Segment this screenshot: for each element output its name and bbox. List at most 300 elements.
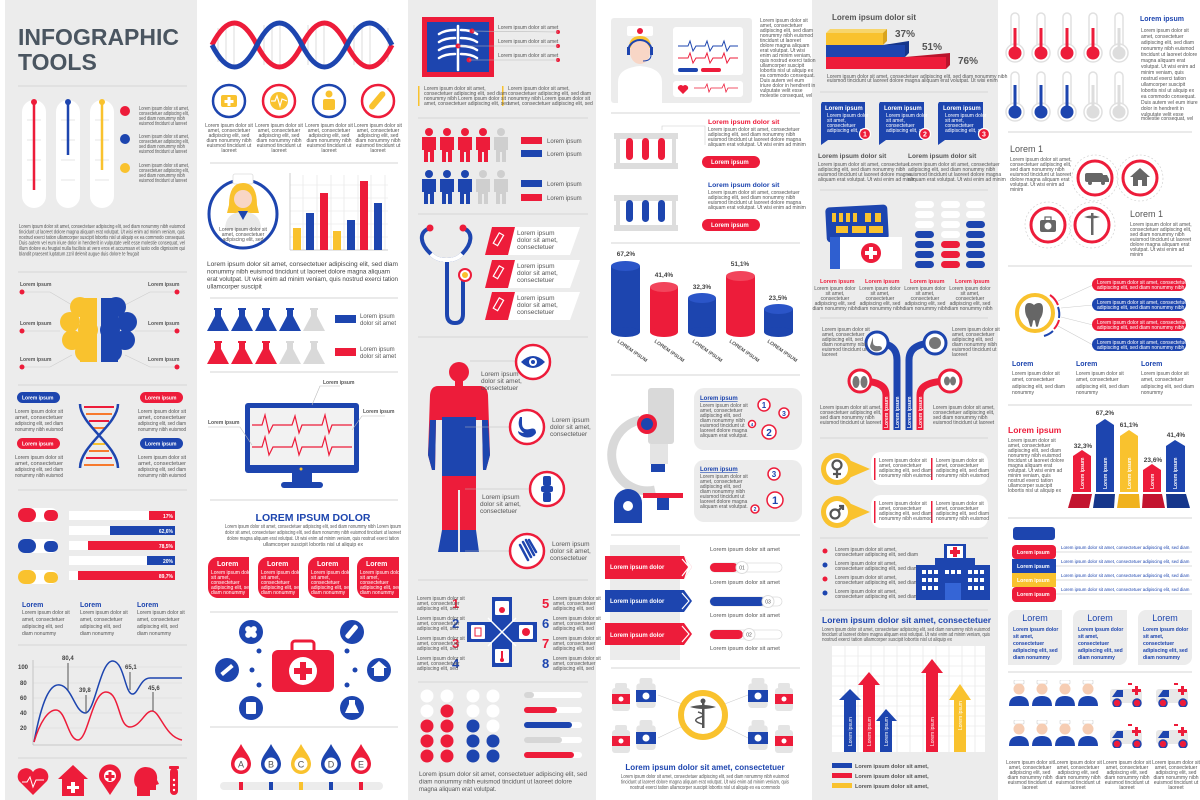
icon circles: ambulance, house, kit, caduceus: minim bbox=[1130, 252, 1143, 258]
four label columns: diam nonummy nibh bbox=[902, 306, 948, 312]
nurse operator with monitor bbox=[611, 18, 752, 103]
arrow bar chart with heading bbox=[822, 615, 992, 752]
test tubes: red: Lorem ipsum dolor sit amet, consectetuer bbox=[708, 127, 800, 133]
bar chart bbox=[290, 173, 388, 250]
ribbons and sliders bbox=[605, 545, 782, 660]
paragraph: nurse text: iriure dolor in hendrerit in bbox=[760, 83, 816, 89]
speech bubbles 1-3: Lorem ipsum dolor bbox=[886, 113, 928, 119]
paragraph: intro: Lorem ipsum dolor sit amet, consectetuer adipiscing elit, sed diam nonummy nibh euismod bbox=[19, 224, 185, 230]
text columns: Lorem: diam nonummy bbox=[137, 631, 172, 637]
paragraph: intro bbox=[19, 224, 185, 258]
legend: thermometers: sed diam nonummy nibh bbox=[139, 144, 185, 150]
text columns: Lorem: diam nonummy bbox=[80, 631, 115, 637]
legend: thermometers: Lorem ipsum dolor sit amet, bbox=[139, 163, 189, 169]
numbered cards: 1 bbox=[762, 401, 767, 410]
test tubes: red: Lorem ipsum bbox=[711, 160, 749, 166]
numbered cross diagram 1-8: amet, consectetuer bbox=[553, 621, 596, 627]
human body diagram: consectetuer bbox=[481, 385, 519, 392]
test tubes: red: aliquam erat volutpat. Ut wisi enim ad minim bbox=[708, 142, 806, 148]
arrow bar chart with percentages: Lorem ipsum bbox=[1127, 457, 1133, 489]
red cards row: adipiscing elit, sed bbox=[261, 585, 302, 591]
numbered cross diagram 1-8: amet, consectetuer bbox=[553, 641, 596, 647]
four label columns: consectetuer bbox=[956, 296, 985, 302]
organ tree diagram: Lorem ipsum dolor sit amet, bbox=[933, 405, 995, 411]
arrow bar chart with percentages: lobortis nisl ut aliquip ex bbox=[1008, 488, 1062, 494]
icon circles row: Lorem ipsum dolor sit bbox=[255, 123, 304, 129]
text: Lorem ipsum (thermometers): volutpat. Ut wisi enim ad bbox=[1141, 64, 1195, 70]
text columns: bottom col 6: adipiscing elit, sed bbox=[1058, 770, 1099, 776]
icon circles row: Lorem ipsum dolor sit bbox=[354, 123, 403, 129]
organ tree diagram bbox=[820, 327, 1000, 430]
DNA with labels: Lorem ipsum bbox=[22, 396, 54, 402]
red cards row: Lorem bbox=[366, 561, 387, 568]
red cards row: adipiscing elit, sed bbox=[211, 585, 252, 591]
icon circles: ambulance, house, kit, caduceus bbox=[1010, 144, 1192, 258]
line chart bbox=[18, 656, 182, 745]
icon circles: ambulance, house, kit, caduceus: euismod tincidunt ut laoreet bbox=[1130, 237, 1192, 243]
gray cards: Lorem: Lorem ipsum dolor bbox=[1013, 627, 1058, 633]
arrow bar chart with percentages: minim veniam, quis bbox=[1008, 473, 1051, 479]
test tubes: blue: euismod tincidunt ut laoreet dolore magna bbox=[708, 200, 801, 206]
numbered cards: 1 bbox=[772, 495, 778, 507]
gray cards: Lorem: diam nonummy bbox=[1143, 655, 1180, 661]
organ tree diagram: Lorem ipsum dolor sit amet, bbox=[820, 405, 882, 411]
ECG monitor: Lorem ipsum bbox=[208, 420, 240, 426]
ribbons and sliders: Lorem ipsum dolor sit amet bbox=[710, 646, 780, 652]
3D bar chart with percentages: Lorem ipsum dolor sit bbox=[832, 13, 916, 22]
blood drops A-E: D bbox=[328, 760, 335, 770]
numbered cross diagram 1-8: Lorem ipsum dolor sit bbox=[553, 616, 601, 622]
text pair: Lorem ipsum dolor sit bbox=[818, 153, 1006, 183]
red cards row: diam nonummy bbox=[261, 590, 296, 596]
icon circles row: adipiscing elit, sed bbox=[358, 133, 399, 139]
text columns: Lorem (col 6): amet, consectetuer bbox=[1012, 377, 1055, 383]
brain diagram: Lorem ipsum bbox=[20, 357, 52, 363]
human body diagram: Lorem ipsum bbox=[552, 541, 590, 548]
paragraph: nurse text: dolore magna aliquam bbox=[760, 43, 809, 49]
numbered cards: Lorem ipsum dolor sit bbox=[700, 474, 748, 480]
speech bubbles 1-3: Lorem ipsum bbox=[884, 106, 922, 112]
paragraph: intro: tincidunt ut laoreet dolore magna aliquam erat volutpat. Ut wisi enim ad minim veniam, quis bbox=[19, 230, 185, 236]
numbered cards: adipiscing elit, sed bbox=[700, 413, 741, 419]
heading: LOREM IPSUM DOLOR: dolor sit amet, consectetuer adipiscing elit, sed diam nonummy nibh euismod tincidunt ut laoreet bbox=[225, 530, 401, 536]
blood drops A-E: A bbox=[238, 760, 244, 770]
text columns: Lorem: adipiscing elit, sed bbox=[22, 624, 63, 630]
organ tree diagram: amet, consectetuer bbox=[822, 332, 865, 338]
icon circles: ambulance, house, kit, caduceus: sed diam nonummy nibh bbox=[1130, 232, 1185, 238]
flasks with legend: Lorem ipsum bbox=[360, 314, 395, 320]
DNA with labels: adipiscing elit, sed diam bbox=[15, 421, 63, 427]
text: Lorem ipsum (thermometers): lobortis nisl ut aliquip ex bbox=[1141, 88, 1195, 94]
text columns: Lorem: diam nonummy bbox=[22, 631, 57, 637]
medicine bottle with labels: Lorem ipsum dolor sit amet, consectetuer adipiscing elit, sed diam bbox=[1061, 545, 1190, 550]
text columns: Lorem (col 6): amet, consectetuer bbox=[1141, 377, 1184, 383]
heading and text: caduceus: Lorem ipsum dolor sit amet, consectetuer bbox=[625, 763, 785, 772]
stethoscope with syringe labels: consectetuer bbox=[517, 309, 555, 316]
icon circles row: amet, consectetuer bbox=[357, 128, 400, 134]
icon circles: ambulance, house, kit, caduceus: minim bbox=[1010, 187, 1023, 193]
test tubes: blue: adipiscing elit, sed diam nonummy nibh bbox=[708, 195, 795, 201]
icon circles row: amet, consectetuer bbox=[208, 128, 251, 134]
hospital with bullet list: Lorem ipsum dolor sit amet, bbox=[835, 575, 897, 581]
cylinder chart: 51,1% bbox=[731, 261, 749, 268]
text columns: bottom col 6: diam nonummy nibh bbox=[1055, 775, 1101, 781]
text columns: Lorem (col 6): nonummy bbox=[1141, 390, 1163, 396]
3D bar chart with percentages: euismod tincidunt ut laoreet dolore magna aliquam erat volutpat. Ut wisi enim bbox=[827, 78, 998, 84]
red cards row: Lorem ipsum dolor bbox=[360, 570, 402, 576]
organ tree diagram: euismod tincidunt ut laoreet bbox=[820, 420, 882, 426]
icon circles: ambulance, house, kit, caduceus: consectetuer adipiscing elit, bbox=[1010, 162, 1071, 168]
ribbons and sliders: Lorem ipsum dolor sit amet bbox=[710, 547, 780, 553]
medicine bottle with labels: Lorem ipsum bbox=[1017, 578, 1050, 584]
icon circles: ambulance, house, kit, caduceus: Lorem ipsum dolor sit amet, bbox=[1010, 157, 1072, 163]
arrow bar chart with heading: nostrud exerci tation ullamcorper suscipit lobortis nisl ut aliquip ex bbox=[822, 637, 952, 643]
four label columns: Lorem ipsum bbox=[955, 279, 990, 285]
numbered cards: 3 bbox=[772, 470, 777, 479]
people icons chart: Lorem ipsum bbox=[547, 196, 582, 202]
line chart: 80 bbox=[20, 681, 27, 687]
text columns: Lorem (col 6): adipiscing elit, sed diam bbox=[1076, 384, 1129, 390]
text columns: bottom col 6: euismod tincidunt ut bbox=[1105, 780, 1150, 786]
blood drops A-E: B bbox=[268, 760, 274, 770]
DNA with labels: Lorem ipsum bbox=[145, 396, 177, 402]
speech bubbles 1-3: consectetuer bbox=[945, 123, 974, 129]
ribbons and sliders: Lorem ipsum dolor sit amet bbox=[710, 580, 780, 586]
numbered cards: 3 bbox=[782, 411, 786, 418]
gender bubbles: nonummy nibh euismod bbox=[936, 516, 989, 522]
text pair: Lorem ipsum dolor sit: Lorem ipsum dolor sit bbox=[908, 153, 977, 160]
legend: thermometers: consectetuer adipiscing elit, bbox=[139, 139, 189, 145]
paragraph: intro: Duis autem vel eum iriure dolor in hendrerit in vulputate velit esse molestie consequat, vel bbox=[19, 240, 185, 246]
paragraph: nurse text: adipiscing elit, sed diam bbox=[760, 28, 813, 34]
red cards row: consectetuer bbox=[311, 580, 340, 586]
people icons chart: Lorem ipsum bbox=[547, 139, 582, 145]
arrow bar chart with percentages bbox=[1008, 410, 1190, 508]
gray cards: Lorem: Lorem ipsum dolor bbox=[1143, 627, 1188, 633]
icon circles: ambulance, house, kit, caduceus: Lorem ipsum dolor sit amet, bbox=[1130, 222, 1192, 228]
tooth diagram with pills: adipiscing elit, sed diam nonummy nibh bbox=[1097, 325, 1184, 331]
organ tree diagram: Lorem ipsum bbox=[884, 396, 890, 428]
numbered cards: 2 bbox=[754, 507, 757, 513]
icon circles: ambulance, house, kit, caduceus: Lorem 1 bbox=[1010, 144, 1043, 154]
text columns: Lorem: adipiscing elit, sed bbox=[80, 624, 121, 630]
numbered cross diagram 1-8: adipiscing elit, sed bbox=[553, 606, 594, 612]
numbered cross diagram 1-8: amet, consectetuer bbox=[553, 661, 596, 667]
tooth diagram with pills: Lorem ipsum dolor sit amet, consectetuer bbox=[1097, 300, 1189, 306]
paragraph: nurse text: Duis autem vel eum bbox=[760, 78, 804, 84]
text columns: Lorem: amet, consectetuer bbox=[22, 617, 65, 623]
text: Lorem ipsum (thermometers) bbox=[1140, 16, 1198, 122]
arrow bar chart with percentages: 23,6% bbox=[1144, 457, 1162, 464]
people icons chart bbox=[422, 128, 582, 204]
numbered cross diagram 1-8: Lorem ipsum dolor sit bbox=[417, 596, 465, 602]
icon circles row: euismod tincidunt ut bbox=[356, 143, 401, 149]
paragraph: nurse text bbox=[760, 18, 816, 99]
text columns: bottom col 6: diam nonummy nibh bbox=[1104, 775, 1150, 781]
thermometer gauges bbox=[22, 99, 114, 208]
paragraph: nurse text: quis nostrud exerci tation bbox=[760, 58, 816, 64]
speech bubbles 1-3: Lorem ipsum dolor bbox=[827, 113, 869, 119]
arrow bar chart with percentages: Lorem ipsum dolor sit bbox=[1008, 438, 1056, 444]
line chart: 45,6 bbox=[148, 686, 160, 692]
numbered cards: 4 bbox=[751, 422, 754, 427]
numbered cross diagram 1-8: amet, consectetuer bbox=[417, 621, 460, 627]
3D bar chart with percentages: 37% bbox=[895, 29, 915, 40]
numbered cards: euismod tincidunt ut bbox=[700, 494, 745, 500]
panel: column 3 background bbox=[408, 0, 596, 800]
text columns: Lorem (col 6): Lorem bbox=[1012, 361, 1033, 368]
text pair: Lorem ipsum dolor sit: euismod tincidunt ut laoreet dolore magna bbox=[908, 172, 1001, 178]
text columns: Lorem (col 6): Lorem bbox=[1141, 361, 1162, 368]
gender bubbles: nonummy nibh euismod bbox=[879, 473, 932, 479]
brain diagram: Lorem ipsum bbox=[20, 282, 52, 288]
paragraph: nurse text: tincidunt ut laoreet bbox=[760, 38, 801, 44]
human body diagram: consectetuer bbox=[550, 555, 588, 562]
hospital with bullet list: consectetuer adipiscing elit, sed diam bbox=[835, 552, 918, 558]
numbered cards: Lorem ipsum dolor sit bbox=[700, 403, 748, 409]
numbered cards: laoreet dolore magna bbox=[700, 428, 747, 434]
paragraph: nurse section: erat volutpat. Ut wisi enim ad minim veniam, quis nostrud exerci tation bbox=[207, 276, 399, 283]
text columns: bottom col 6: diam nonummy nibh bbox=[1153, 775, 1199, 781]
numbered cross diagram 1-8: adipiscing elit, sed bbox=[553, 626, 594, 632]
icon circles row: adipiscing elit, sed bbox=[309, 133, 350, 139]
numbered cross diagram 1-8: amet, consectetuer bbox=[417, 661, 460, 667]
numbered cross diagram 1-8: 4 bbox=[452, 656, 460, 671]
text columns: Lorem (col 6): Lorem ipsum dolor sit bbox=[1012, 371, 1060, 377]
line chart: 100 bbox=[18, 665, 29, 671]
medicine bottle with labels: Lorem ipsum dolor sit amet, consectetuer adipiscing elit, sed diam bbox=[1061, 587, 1190, 592]
line chart: 60 bbox=[20, 696, 27, 702]
red cards row: Lorem bbox=[267, 561, 288, 568]
legend: arrow chart: Lorem ipsum dolor sit amet, bbox=[855, 764, 929, 770]
medicine bottle with labels: Lorem ipsum dolor sit amet, consectetuer adipiscing elit, sed diam bbox=[1061, 559, 1190, 564]
heading: LOREM IPSUM DOLOR bbox=[225, 512, 401, 548]
text columns: bottom col 6: laoreet bbox=[1022, 785, 1038, 791]
heading: LOREM IPSUM DOLOR: ullamcorper suscipit lobortis nisl ut aliquip ex bbox=[263, 542, 364, 548]
speech bubbles 1-3: adipiscing elit, sed bbox=[886, 128, 927, 134]
text: Lorem ipsum (thermometers): Lorem ipsum bbox=[1140, 16, 1184, 23]
DNA with labels: nonummy nibh euismod bbox=[15, 427, 63, 433]
four label columns: Lorem ipsum bbox=[865, 279, 900, 285]
arrow bar chart with percentages: Lorem ipsum bbox=[1103, 457, 1109, 489]
four label columns bbox=[812, 279, 993, 312]
speech bubbles 1-3: consectetuer bbox=[827, 123, 856, 129]
text: Lorem ipsum (thermometers): tincidunt ut laoreet dolore bbox=[1141, 52, 1197, 58]
icon circles row: adipiscing elit, sed bbox=[209, 133, 250, 139]
stethoscope with syringe labels: Lorem ipsum bbox=[517, 263, 555, 270]
four label columns: sit amet, bbox=[961, 291, 979, 297]
four label columns: consectetuer bbox=[911, 296, 940, 302]
four label columns: Lorem ipsum bbox=[910, 279, 945, 285]
gray cards: Lorem: consectetuer bbox=[1143, 641, 1174, 647]
3D bar chart with percentages: 76% bbox=[958, 56, 978, 67]
organ tree diagram: Lorem ipsum bbox=[907, 396, 913, 428]
x-ray with callouts: Lorem ipsum dolor sit amet bbox=[498, 25, 559, 31]
panel: column 5 background bbox=[812, 0, 998, 800]
icon circles: ambulance, house, kit, caduceus: consectetuer adipiscing elit, bbox=[1130, 227, 1191, 233]
people icons chart: Lorem ipsum bbox=[547, 182, 582, 188]
cylinder chart: LOREM IPSUM bbox=[691, 339, 723, 364]
text columns: bottom col 6: adipiscing elit, sed bbox=[1107, 770, 1148, 776]
icon circles row: laoreet bbox=[370, 148, 386, 154]
nurse avatar circle: adipiscing elit, sed bbox=[223, 237, 264, 243]
heading and text: caduceus: Lorem ipsum dolor sit amet, consectetuer adipiscing elit, sed diam nonummy nibh euismod bbox=[621, 774, 789, 780]
numbered cross diagram 1-8: 8 bbox=[542, 656, 549, 671]
tooth diagram with pills: Lorem ipsum dolor sit amet, consectetuer bbox=[1097, 320, 1189, 326]
icon circles row: euismod tincidunt ut bbox=[257, 143, 302, 149]
text blocks with yellow bars: Lorem ipsum dolor sit amet, bbox=[424, 86, 486, 92]
text pair: Lorem ipsum dolor sit: aliquam erat volutpat. Ut wisi enim ad minim bbox=[818, 177, 916, 183]
numbered cards: diam nonummy nibh bbox=[700, 418, 745, 424]
text columns: bottom col 6: amet, consectetuer bbox=[1106, 765, 1149, 771]
paragraph: bottom col 3 bbox=[419, 772, 587, 793]
numbered cards: diam nonummy nibh bbox=[700, 489, 745, 495]
numbered cards: laoreet dolore magna bbox=[700, 499, 747, 505]
text blocks with yellow bars: consectetuer adipiscing elit, sed diam bbox=[424, 91, 507, 97]
arrow bar chart with percentages: 61,1% bbox=[1120, 422, 1138, 429]
ribbons and sliders: Lorem ipsum dolor bbox=[610, 633, 665, 639]
DNA with labels: Lorem ipsum bbox=[22, 442, 54, 448]
text columns: bottom col 6: adipiscing elit, sed bbox=[1010, 770, 1051, 776]
numbered cross diagram 1-8: adipiscing elit, sed bbox=[553, 666, 594, 672]
arrow bar chart with percentages: volutpat. Ut wisi enim ad bbox=[1008, 468, 1062, 474]
x-ray with callouts: Lorem ipsum dolor sit amet bbox=[498, 53, 559, 59]
icon circles row bbox=[205, 85, 403, 154]
arrow bar chart with percentages: adipiscing elit, sed diam bbox=[1008, 448, 1061, 454]
capsules with percentage bars: 89,7% bbox=[159, 574, 174, 580]
text columns: bottom col 6: amet, consectetuer bbox=[1155, 765, 1198, 771]
text columns: Lorem: adipiscing elit, sed bbox=[137, 624, 178, 630]
text: Lorem ipsum (thermometers): ullamcorper suscipit bbox=[1141, 82, 1186, 88]
speech bubbles 1-3: sit amet, bbox=[827, 118, 846, 124]
DNA with labels: amet, consectetuer bbox=[138, 415, 186, 421]
arrow bar chart with heading: Lorem ipsum bbox=[930, 717, 936, 746]
speech bubbles 1-3: sit amet, bbox=[886, 118, 905, 124]
numbered cross diagram 1-8: amet, consectetuer bbox=[417, 601, 460, 607]
text columns: Lorem: amet, consectetuer bbox=[137, 617, 180, 623]
DNA with labels: Lorem ipsum dolor sit bbox=[138, 409, 187, 415]
test tubes: blue bbox=[614, 182, 806, 231]
icon circles: ambulance, house, kit, caduceus: dolore magna aliquam erat bbox=[1130, 242, 1190, 248]
gray cards: Lorem: adipiscing elit, sed bbox=[1013, 648, 1058, 654]
gray cards: Lorem: diam nonummy bbox=[1013, 655, 1050, 661]
cylinder chart: 67,2% bbox=[617, 251, 635, 258]
four label columns: Lorem ipsum dolor bbox=[814, 286, 856, 292]
numbered cross diagram 1-8: 1 bbox=[452, 596, 459, 611]
organ tree diagram: euismod tincidunt ut bbox=[952, 347, 997, 353]
numbered cross diagram 1-8: Lorem ipsum dolor sit bbox=[553, 596, 601, 602]
icon circles row: amet, consectetuer bbox=[258, 128, 301, 134]
paragraph: nurse text: vulputate velit esse bbox=[760, 88, 803, 94]
organ tree diagram: Lorem ipsum dolor sit bbox=[952, 327, 1000, 333]
speech bubbles 1-3: adipiscing elit, sed bbox=[827, 128, 868, 134]
arrow bar chart with heading: Lorem ipsum bbox=[867, 717, 873, 746]
icon circles row: Lorem ipsum dolor sit bbox=[205, 123, 254, 129]
text: Lorem ipsum (thermometers): dolor in hendrerit in bbox=[1141, 106, 1184, 112]
human body diagram: dolor sit amet, bbox=[480, 501, 521, 508]
speech bubbles 1-3: Lorem ipsum bbox=[825, 106, 863, 112]
paragraph: nurse text: nonummy nibh euismod bbox=[760, 33, 813, 39]
medicine bottle with labels: Lorem ipsum bbox=[1017, 592, 1050, 598]
text blocks with yellow bars: nonummy nibh Lorem ipsum dolor sit bbox=[508, 96, 591, 102]
text pair: Lorem ipsum dolor sit: euismod tincidunt ut laoreet dolore magna bbox=[818, 172, 911, 178]
first aid kit with icon ring bbox=[215, 620, 391, 720]
gender bubbles: Lorem ipsum dolor sit bbox=[936, 501, 984, 507]
organ tree diagram: euismod tincidunt ut bbox=[822, 347, 867, 353]
paragraph: bottom col 3: diam nonummy nibh euismod tincidunt ut laoreet dolore bbox=[419, 780, 573, 786]
red cards row: Lorem ipsum dolor bbox=[211, 570, 253, 576]
gray cards: Lorem bbox=[1008, 610, 1192, 665]
gender bubbles: Lorem ipsum dolor sit bbox=[936, 458, 984, 464]
speech bubbles 1-3: 1 bbox=[863, 132, 867, 138]
text blocks with yellow bars: nonummy nibh Lorem ipsum dolor sit bbox=[424, 96, 507, 102]
arrow bar chart with percentages: Lorem ipsum bbox=[1173, 457, 1179, 489]
DNA with labels: adipiscing elit, sed diam bbox=[138, 467, 186, 473]
arrow bar chart with heading: tincidunt ut laoreet dolore magna aliquam erat volutpat. Ut wisi enim ad minim veniam, quis bbox=[822, 632, 990, 638]
gray cards: Lorem: Lorem bbox=[1022, 613, 1048, 623]
heading: LOREM IPSUM DOLOR: Lorem ipsum dolor sit amet, consectetuer adipiscing elit, sed diam nonummy nibh Lorem ipsum bbox=[225, 524, 401, 530]
red cards row: consectetuer bbox=[261, 580, 290, 586]
paragraph: nurse text: enim ad minim veniam, bbox=[760, 53, 811, 59]
tooth diagram with pills: adipiscing elit, sed diam nonummy nibh bbox=[1097, 285, 1184, 291]
red cards row: consectetuer bbox=[211, 580, 240, 586]
blood drops A-E: E bbox=[358, 760, 364, 770]
icon circles: ambulance, house, kit, caduceus: euismod tincidunt ut laoreet bbox=[1010, 172, 1072, 178]
arrow bar chart with percentages: 41,4% bbox=[1167, 432, 1185, 439]
red cards row: sit amet, bbox=[211, 575, 230, 581]
text columns: bottom col 6: euismod tincidunt ut bbox=[1154, 780, 1199, 786]
paragraph: nurse text: ullamcorper suscipit bbox=[760, 63, 805, 69]
text columns: Lorem (col 6): adipiscing elit, sed diam bbox=[1141, 384, 1194, 390]
organ tree diagram: euismod tincidunt ut laoreet bbox=[933, 420, 995, 426]
numbered cards: 2 bbox=[766, 428, 772, 439]
organ tree diagram: adipiscing elit, sed bbox=[822, 337, 863, 343]
title: TOOLS bbox=[18, 49, 97, 75]
text blocks with yellow bars: amet, consectetuer adipiscing elit, sed bbox=[424, 101, 509, 107]
pill box and pill stacks bbox=[825, 201, 985, 269]
legend: thermometers: consectetuer adipiscing elit, bbox=[139, 111, 189, 117]
human body diagram: dolor sit amet, bbox=[481, 378, 522, 385]
line chart: 40 bbox=[20, 711, 27, 717]
numbered cross diagram 1-8: 7 bbox=[542, 636, 549, 651]
text: Lorem ipsum (thermometers): amet, consectetuer bbox=[1141, 34, 1184, 40]
paragraph: nurse text: molestie consequat, vel bbox=[760, 93, 812, 99]
human body diagram: dolor sit amet, bbox=[550, 424, 591, 431]
ECG monitor: Lorem ipsum bbox=[323, 380, 355, 386]
brain diagram bbox=[20, 282, 180, 370]
icon circles row: diam nonummy nibh bbox=[355, 138, 401, 144]
stethoscope with syringe labels: dolor sit amet, bbox=[517, 302, 558, 309]
four label columns: Lorem ipsum dolor bbox=[949, 286, 991, 292]
text columns: Lorem (col 6): Lorem ipsum dolor sit bbox=[1141, 371, 1189, 377]
flasks with legend: dolor sit amet bbox=[360, 354, 396, 360]
text: Lorem ipsum (thermometers): Lorem ipsum dolor sit bbox=[1141, 28, 1189, 34]
speech bubbles 1-3: consectetuer bbox=[886, 123, 915, 129]
DNA with labels: Lorem ipsum dolor sit bbox=[15, 409, 64, 415]
caduceus with bottles bbox=[612, 678, 793, 753]
red cards row: consectetuer bbox=[360, 580, 389, 586]
3D bar chart with percentages: 51% bbox=[922, 42, 942, 53]
numbered cross diagram 1-8: adipiscing elit, sed bbox=[553, 646, 594, 652]
icon circles row: diam nonummy nibh bbox=[206, 138, 252, 144]
text pair: Lorem ipsum dolor sit: adipiscing elit, sed diam nonummy nibh bbox=[908, 167, 995, 173]
text columns: Lorem: Lorem ipsum dolor sit bbox=[80, 610, 128, 616]
stethoscope with syringe labels: dolor sit amet, bbox=[517, 237, 558, 244]
speech bubbles 1-3: sit amet, bbox=[945, 118, 964, 124]
icon circles row: Lorem ipsum dolor sit bbox=[305, 123, 354, 129]
numbered cards: adipiscing elit, sed bbox=[700, 484, 741, 490]
flasks with legend: Lorem ipsum bbox=[360, 347, 395, 353]
